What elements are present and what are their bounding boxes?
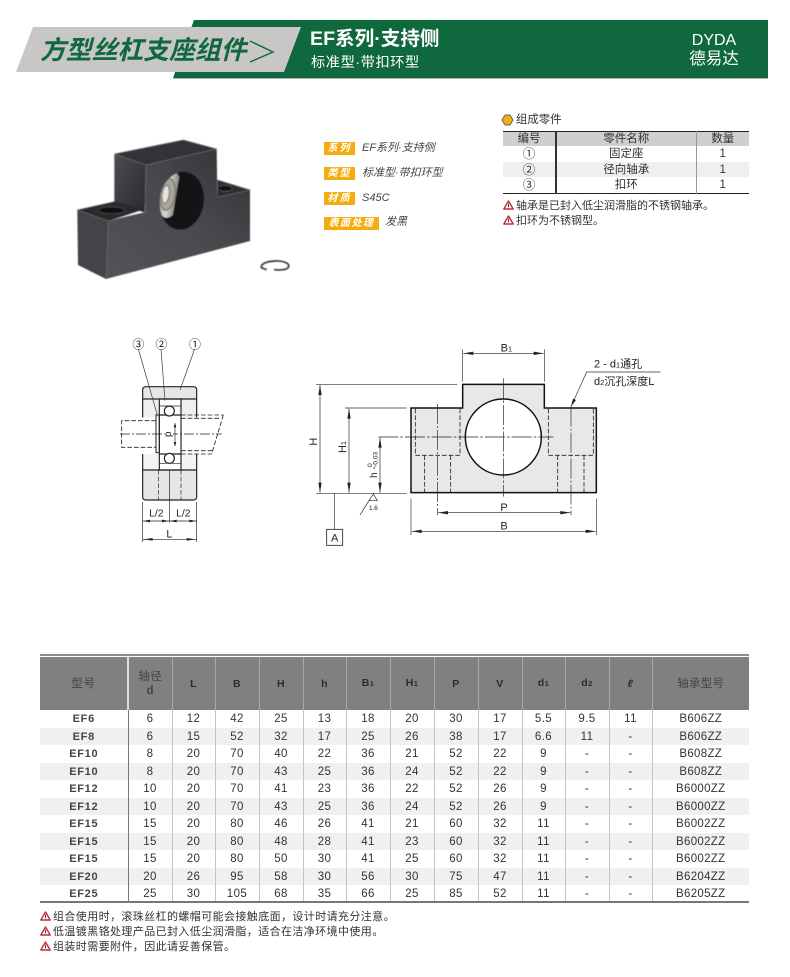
hole callout line 1: 2 - d1通孔 bbox=[594, 358, 642, 371]
specification table: 20 bbox=[405, 713, 419, 725]
specification table: - bbox=[628, 836, 633, 848]
footer note 3: 组装时需要附件，因此请妥善保管。 bbox=[53, 941, 235, 953]
specification table: 轴承型号 bbox=[677, 678, 724, 690]
h dimension: -0.03 bbox=[373, 452, 380, 467]
specification table: EF15 bbox=[69, 853, 98, 865]
parts table: 1 bbox=[720, 164, 726, 176]
specification table: 轴径 bbox=[138, 670, 162, 682]
material value: S45C bbox=[362, 192, 390, 204]
leaders bbox=[138, 349, 195, 415]
specification table: P bbox=[452, 678, 460, 690]
B dimension bbox=[412, 521, 596, 533]
counterbores bbox=[415, 409, 593, 493]
specification table: 25 bbox=[318, 800, 331, 812]
specification table: 11 bbox=[537, 836, 550, 848]
surface roughness symbol: 1.6 bbox=[369, 505, 378, 512]
specification table: 25 bbox=[143, 888, 157, 900]
center lines bbox=[378, 378, 571, 515]
parts table: 1 bbox=[720, 148, 726, 160]
d dimension: d bbox=[163, 432, 174, 437]
specification table: - bbox=[585, 818, 589, 830]
specification table: 43 bbox=[274, 800, 288, 812]
P dimension: P bbox=[500, 502, 508, 514]
specification table: 26 bbox=[318, 818, 331, 830]
parts table: 扣环 bbox=[615, 179, 638, 191]
specification table: EF12 bbox=[69, 783, 98, 795]
specification table: 22 bbox=[405, 783, 419, 795]
specification table: 36 bbox=[361, 783, 375, 795]
specification table: 80 bbox=[230, 818, 244, 830]
parts table: 固定座 bbox=[609, 148, 644, 160]
right shoulder top bbox=[217, 180, 250, 197]
specification table: 20 bbox=[187, 836, 200, 848]
specification table: 15 bbox=[143, 836, 157, 848]
parts table: ① bbox=[523, 147, 535, 161]
block top bbox=[114, 140, 217, 165]
specification table: 9 bbox=[540, 800, 547, 812]
bore bbox=[156, 169, 207, 232]
specification table: EF20 bbox=[69, 870, 98, 882]
specification table: - bbox=[585, 800, 589, 812]
specification table: 66 bbox=[361, 888, 375, 900]
specification table: 6 bbox=[147, 730, 153, 742]
footer note 2: 低温镀黑铬处理产品已封入低尘润滑脂，适合在洁净环境中使用。 bbox=[53, 926, 384, 938]
specification table: - bbox=[585, 870, 589, 882]
part callouts: ① bbox=[189, 337, 201, 351]
specification table: 70 bbox=[230, 766, 244, 778]
specification table: 10 bbox=[143, 800, 157, 812]
specification table: 6.6 bbox=[535, 730, 552, 742]
specification table: 11 bbox=[581, 730, 593, 742]
specification table: 48 bbox=[274, 836, 288, 848]
specification table: 10 bbox=[143, 783, 157, 795]
H dimension: H bbox=[308, 438, 320, 446]
specification table: 32 bbox=[493, 853, 507, 865]
specification table: 41 bbox=[274, 783, 288, 795]
specification table: EF15 bbox=[69, 836, 98, 848]
parts table: ② bbox=[523, 162, 535, 176]
specification table: EF10 bbox=[69, 766, 98, 778]
body fill bbox=[143, 387, 197, 500]
specification table: 9 bbox=[540, 783, 547, 795]
center lines bbox=[120, 434, 222, 523]
hole callout line 2: d2沉孔深度L bbox=[594, 374, 654, 388]
specification table: 36 bbox=[361, 748, 375, 760]
specification table: B6002ZZ bbox=[676, 836, 725, 848]
specification table: 25 bbox=[405, 888, 419, 900]
specification table: 60 bbox=[449, 818, 463, 830]
specification table: 22 bbox=[318, 748, 331, 760]
parts heading icon bbox=[502, 114, 514, 126]
specification table: 41 bbox=[361, 836, 375, 848]
specification table: B608ZZ bbox=[679, 766, 722, 778]
specification table: 30 bbox=[405, 870, 419, 882]
retaining ring bbox=[261, 261, 289, 270]
specification table: 35 bbox=[318, 888, 331, 900]
specification table: B6002ZZ bbox=[676, 818, 725, 830]
specification table: 15 bbox=[143, 853, 157, 865]
specification table: 11 bbox=[537, 888, 550, 900]
brand latin: DYDA bbox=[692, 32, 736, 49]
specification table: 17 bbox=[493, 713, 507, 725]
specification table: B1 bbox=[362, 677, 374, 689]
parts table bbox=[503, 131, 749, 194]
specification table: 20 bbox=[187, 818, 200, 830]
specification table: 6 bbox=[147, 713, 153, 725]
specification table: 26 bbox=[187, 870, 200, 882]
specification table: H1 bbox=[406, 677, 418, 689]
block left side bbox=[114, 154, 146, 212]
L label: L bbox=[166, 528, 172, 540]
specification table: 8 bbox=[147, 766, 153, 778]
specification table: 85 bbox=[449, 888, 463, 900]
specification table: 30 bbox=[318, 853, 331, 865]
specification table: 75 bbox=[449, 870, 463, 882]
specification table: 50 bbox=[274, 853, 288, 865]
specification table: ℓ bbox=[628, 678, 633, 690]
specification table: 22 bbox=[493, 748, 507, 760]
specification table: 20 bbox=[187, 783, 200, 795]
specification table: 80 bbox=[230, 853, 244, 865]
B1 dimension: B1 bbox=[501, 342, 512, 354]
d dimension bbox=[163, 423, 176, 447]
specification table: 13 bbox=[318, 713, 331, 725]
specification table: EF8 bbox=[73, 730, 95, 742]
specification table: 41 bbox=[361, 853, 375, 865]
specification table: 52 bbox=[449, 748, 463, 760]
specification table: 20 bbox=[187, 766, 200, 778]
specification table: 21 bbox=[405, 818, 419, 830]
specification table: 11 bbox=[537, 818, 550, 830]
specification table: - bbox=[628, 853, 633, 865]
specification table: EF15 bbox=[69, 818, 98, 830]
L dimensions bbox=[143, 502, 197, 542]
specification table: 68 bbox=[274, 888, 288, 900]
specification table: 52 bbox=[230, 730, 244, 742]
specification table: 52 bbox=[449, 783, 463, 795]
L/2 right label: L/2 bbox=[176, 509, 191, 520]
specification table: - bbox=[628, 800, 633, 812]
series subheading: 标准型·带扣环型 bbox=[311, 55, 420, 71]
specification table: B6000ZZ bbox=[676, 783, 725, 795]
specification table: B bbox=[233, 678, 241, 690]
specification table: 36 bbox=[361, 766, 375, 778]
specification table: - bbox=[628, 730, 633, 742]
specification table: 25 bbox=[361, 730, 375, 742]
specification table: 26 bbox=[405, 730, 419, 742]
brand chinese: 德易达 bbox=[689, 50, 739, 68]
specification table: 11 bbox=[537, 853, 550, 865]
specification table: 9 bbox=[540, 766, 547, 778]
specification table: 95 bbox=[230, 870, 244, 882]
specification table: H bbox=[277, 678, 285, 690]
bore circle bbox=[465, 399, 541, 475]
specification table: 25 bbox=[318, 766, 331, 778]
parts note 1: 轴承是已封入低尘润滑脂的不锈钢轴承。 bbox=[516, 200, 714, 212]
bearing bbox=[156, 399, 181, 470]
body outline bbox=[411, 384, 596, 493]
specification table: 25 bbox=[274, 713, 288, 725]
specification table: 60 bbox=[449, 853, 463, 865]
specification table: 17 bbox=[493, 730, 507, 742]
surface roughness symbol bbox=[360, 494, 378, 515]
specification table: - bbox=[585, 783, 589, 795]
specification table: 46 bbox=[274, 818, 288, 830]
specification table: 28 bbox=[318, 836, 331, 848]
specification table: 32 bbox=[274, 730, 288, 742]
specification table: 38 bbox=[449, 730, 463, 742]
specification table: 9.5 bbox=[578, 713, 596, 725]
specification table: 41 bbox=[361, 818, 375, 830]
specification table: 12 bbox=[187, 713, 200, 725]
specification table: 52 bbox=[449, 800, 463, 812]
specification table: 20 bbox=[187, 748, 200, 760]
specification table: 32 bbox=[493, 818, 507, 830]
specification table: 23 bbox=[405, 836, 419, 848]
specification table: EF25 bbox=[69, 888, 98, 900]
specification table: 70 bbox=[230, 748, 244, 760]
specification table: 20 bbox=[187, 853, 200, 865]
specification table: EF12 bbox=[69, 800, 98, 812]
series label: 系列 bbox=[328, 143, 352, 154]
footer note 1: 组合使用时，滚珠丝杠的螺帽可能会接触底面，设计时请充分注意。 bbox=[53, 911, 395, 923]
parts note 2: 扣环为不锈钢型。 bbox=[516, 215, 604, 227]
series value: EF系列·支持侧 bbox=[362, 142, 435, 154]
specification table: 60 bbox=[449, 836, 463, 848]
specification table: - bbox=[585, 766, 589, 778]
specification table: 26 bbox=[493, 783, 507, 795]
specification table: 70 bbox=[230, 783, 244, 795]
specification table: 105 bbox=[227, 888, 247, 900]
h dimension: h - bbox=[369, 466, 380, 478]
specification table: 21 bbox=[405, 748, 419, 760]
mounting hole right bbox=[218, 185, 232, 191]
spec labels bbox=[324, 142, 444, 230]
front face bbox=[106, 149, 250, 279]
specification table: 20 bbox=[187, 800, 200, 812]
specification table: 52 bbox=[493, 888, 507, 900]
specification table: d bbox=[147, 684, 154, 696]
specification table: 11 bbox=[624, 713, 637, 725]
parts table: ③ bbox=[523, 178, 535, 192]
B dimension: B bbox=[500, 521, 508, 533]
table bottom rule bbox=[40, 901, 749, 902]
specification table: - bbox=[585, 888, 589, 900]
extension lines bbox=[316, 349, 596, 535]
specification table: 24 bbox=[405, 800, 419, 812]
main title: 方型丝杠支座组件 bbox=[40, 37, 246, 65]
specification table: 17 bbox=[318, 730, 331, 742]
table top rule bbox=[40, 654, 749, 656]
specification table: - bbox=[628, 783, 633, 795]
specification table: h bbox=[321, 678, 328, 690]
material label bbox=[324, 192, 355, 205]
h dimension: 0 bbox=[367, 463, 374, 467]
specification table: 18 bbox=[361, 713, 375, 725]
specification table: 32 bbox=[493, 836, 507, 848]
parts table: 数量 bbox=[711, 133, 734, 145]
specification table: - bbox=[628, 870, 633, 882]
specification table: 型号 bbox=[71, 678, 96, 690]
series heading: EF系列·支持侧 bbox=[310, 28, 440, 50]
surface label: 表面处理 bbox=[328, 218, 374, 229]
header banner bbox=[16, 20, 768, 79]
specification table: EF6 bbox=[73, 713, 95, 725]
side section drawing bbox=[120, 337, 224, 542]
edge highlights bbox=[77, 140, 250, 279]
parts table: 1 bbox=[720, 179, 726, 191]
h dimension bbox=[367, 438, 382, 493]
parts table: 零件名称 bbox=[603, 133, 649, 145]
datum A: A bbox=[331, 532, 339, 544]
left end bbox=[77, 210, 108, 279]
specification table: 36 bbox=[361, 800, 375, 812]
specification table: 25 bbox=[405, 853, 419, 865]
specification table: 24 bbox=[405, 766, 419, 778]
specification table: B6000ZZ bbox=[676, 800, 725, 812]
specification table: 80 bbox=[230, 836, 244, 848]
specification table: 52 bbox=[449, 766, 463, 778]
specification table: B606ZZ bbox=[679, 730, 722, 742]
H1 dimension: H1 bbox=[337, 441, 349, 453]
parts heading: 组成零件 bbox=[516, 114, 562, 126]
specification table: 22 bbox=[493, 766, 507, 778]
front dimension drawing bbox=[308, 342, 661, 546]
mounting hole left bbox=[98, 207, 125, 214]
specification table: 8 bbox=[147, 748, 153, 760]
hole leader bbox=[571, 372, 661, 407]
specification table: 26 bbox=[493, 800, 507, 812]
shaft bbox=[122, 415, 223, 454]
specification table: d1 bbox=[538, 677, 549, 689]
specification table: 58 bbox=[274, 870, 288, 882]
series label bbox=[324, 142, 355, 155]
specification table: - bbox=[628, 818, 633, 830]
specification table: L bbox=[190, 678, 197, 690]
B1 dimension bbox=[463, 342, 544, 355]
specification table: B6205ZZ bbox=[676, 888, 725, 900]
product photo bbox=[76, 139, 290, 280]
specification table: - bbox=[628, 766, 633, 778]
specification table: - bbox=[585, 748, 589, 760]
specification table: 30 bbox=[318, 870, 331, 882]
specification table: B6002ZZ bbox=[676, 853, 725, 865]
specification table: 9 bbox=[540, 748, 547, 760]
type label bbox=[324, 167, 355, 180]
specification table: B6204ZZ bbox=[676, 870, 725, 882]
datum A bbox=[327, 493, 343, 545]
surface value: 发黑 bbox=[385, 216, 407, 228]
specification table: B608ZZ bbox=[679, 748, 722, 760]
specification table: 30 bbox=[187, 888, 200, 900]
specification table: 5.5 bbox=[535, 713, 552, 725]
specification table: - bbox=[628, 888, 633, 900]
parts table: 编号 bbox=[518, 133, 540, 145]
L/2 left label: L/2 bbox=[149, 509, 164, 520]
part callouts: ③ bbox=[132, 337, 144, 351]
specification table: - bbox=[585, 836, 589, 848]
specification table: 11 bbox=[537, 870, 550, 882]
specification table: 20 bbox=[143, 870, 157, 882]
specification table: V bbox=[496, 678, 504, 690]
green banner background bbox=[173, 20, 768, 79]
specification table: 56 bbox=[361, 870, 375, 882]
specification table: 15 bbox=[187, 730, 200, 742]
part callouts bbox=[132, 337, 201, 351]
specification table: - bbox=[628, 748, 633, 760]
grey title plate bbox=[16, 27, 301, 72]
specification table: 23 bbox=[318, 783, 331, 795]
specification table: 30 bbox=[449, 713, 463, 725]
specification table: 15 bbox=[143, 818, 157, 830]
specification table: 43 bbox=[274, 766, 288, 778]
specification table: - bbox=[585, 853, 589, 865]
P dimension bbox=[438, 502, 570, 514]
parts table: 径向轴承 bbox=[603, 164, 649, 176]
left shoulder top bbox=[77, 202, 145, 221]
title chevron bbox=[250, 40, 274, 63]
material label: 材质 bbox=[328, 193, 352, 204]
specification table: 47 bbox=[493, 870, 507, 882]
specification table: B606ZZ bbox=[679, 713, 722, 725]
body outline bbox=[143, 387, 197, 500]
specification table: EF10 bbox=[69, 748, 98, 760]
type label: 类型 bbox=[328, 168, 352, 179]
H1 dimension bbox=[337, 409, 351, 493]
type value: 标准型·带扣环型 bbox=[362, 167, 443, 179]
specification table: d2 bbox=[581, 677, 593, 689]
specification table: 40 bbox=[274, 748, 288, 760]
part callouts: ② bbox=[155, 337, 167, 351]
specification table: 42 bbox=[230, 713, 244, 725]
specification table: 70 bbox=[230, 800, 244, 812]
bearing bbox=[158, 172, 180, 219]
specification table bbox=[40, 657, 749, 901]
H dimension bbox=[308, 385, 322, 493]
